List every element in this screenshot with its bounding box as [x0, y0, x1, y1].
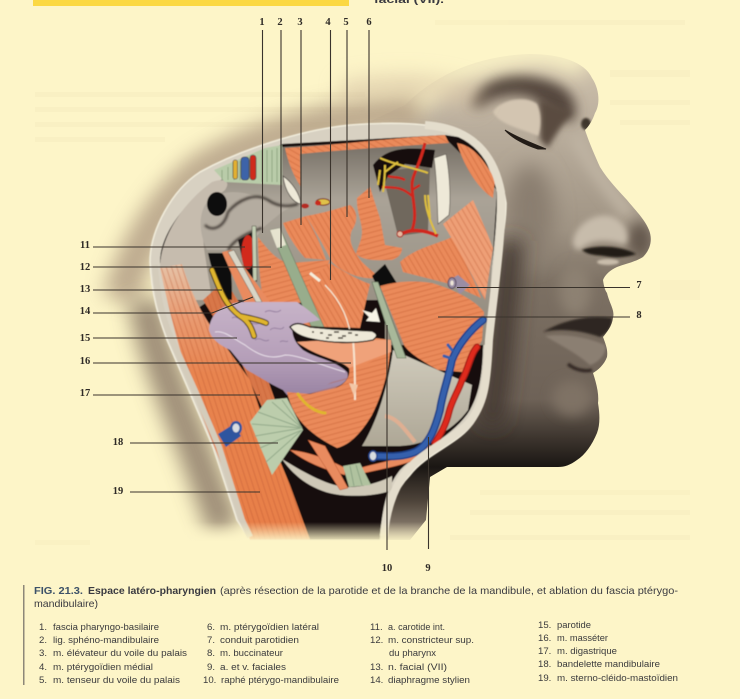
leader lines, left: [93, 247, 351, 492]
numbers, top: 6: [366, 17, 372, 28]
face shading: philtrum: [558, 272, 592, 316]
pale duct trace: [385, 416, 415, 442]
figure caption: (après résection de la parotide et de la branche de la mandibule, et ablation du fascia ptérygo-: [220, 586, 678, 597]
legend column 2: conduit parotidien: [220, 635, 299, 646]
fossa behind maxillary artery: [382, 165, 430, 236]
legend column 2: 6.: [207, 622, 215, 633]
top yellow bar: [33, 0, 349, 6]
mandibular band (18): [250, 398, 303, 475]
legend column 2: 8.: [207, 648, 215, 659]
numbers, right and bottom: [382, 280, 642, 574]
caption side rule: [23, 585, 24, 685]
legend column 4: bandelette mandibulaire: [557, 659, 660, 670]
legend column 4: parotide: [557, 620, 591, 631]
submandibular grey area: [362, 350, 472, 446]
lateral pterygoid (6): [356, 187, 402, 260]
legend column 1: m. élévateur du voile du palais: [53, 648, 187, 659]
coronoid tendon right: [434, 154, 450, 224]
numbers, left: 16: [80, 356, 90, 367]
nerve branches: [378, 158, 436, 234]
sterno-cleido-mastoid (19): [160, 264, 310, 540]
facial artery, red (9): [435, 347, 477, 443]
legend column 1: [39, 622, 187, 686]
upper green fibres: [214, 145, 282, 185]
buccinator (8): [380, 281, 484, 372]
face shading: under nostril: [597, 259, 619, 265]
numbers, top: 2: [277, 17, 283, 28]
superior constrictor (12): [258, 237, 330, 303]
leader lines, top: [262, 30, 369, 280]
numbers, top: [259, 17, 372, 28]
black gap by pterygoid: [372, 264, 398, 288]
face shading: dark beside eye: [540, 100, 572, 148]
vessels: red artery: [250, 155, 256, 180]
subdigastric sling: [282, 459, 392, 496]
numbers, top: 4: [325, 17, 331, 28]
mandible cut, bone: [290, 324, 377, 343]
parotid duct (7): [448, 275, 470, 294]
legend column 4: [538, 620, 678, 684]
leader lines, right: [438, 288, 630, 317]
legend column 2: a. et v. faciales: [220, 662, 286, 673]
numbers, right and bottom: 9: [425, 563, 431, 574]
numbers, left: 15: [80, 333, 90, 344]
numbers, right and bottom: 7: [636, 280, 642, 291]
maxillary artery: [382, 143, 438, 236]
numbers, left: 13: [80, 284, 90, 295]
face shading: sublabial crease: [568, 364, 592, 371]
digastric tendon, green: [343, 463, 371, 487]
face shading: chin: [552, 380, 592, 416]
legend column 1: 5.: [39, 675, 47, 686]
legend column 2: 9.: [207, 662, 215, 673]
legend column 3: m. constricteur sup.: [388, 635, 474, 646]
legend column 3: 14.: [370, 675, 383, 686]
legend column 4: 15.: [538, 620, 551, 631]
legend column 3: n. facial (VII): [388, 662, 447, 673]
raphe strip (10): [372, 282, 406, 358]
left contour overlay: [155, 265, 250, 537]
figure caption: Espace latéro-pharyngien: [88, 586, 216, 597]
figure caption: FIG. 21.3.: [34, 586, 83, 597]
fossa, black top: [373, 149, 435, 192]
face shading: nose tip: [628, 222, 652, 258]
legend column 4: m. masséter: [557, 633, 609, 644]
upper cheek muscle: [400, 237, 481, 298]
legend column 2: 7.: [207, 635, 215, 646]
legend column 4: m. digastrique: [557, 646, 617, 657]
artery stump: [397, 231, 403, 237]
numbers, left: 18: [113, 437, 123, 448]
legend column 1: 4.: [39, 662, 47, 673]
legend column 3: [370, 622, 474, 686]
vein stump: [369, 451, 377, 461]
dark behind carotid: [238, 230, 257, 282]
legend column 3: 13.: [370, 662, 383, 673]
temporal arch muscle: [285, 135, 449, 187]
face: closed eye lashes: [505, 130, 546, 149]
jugular stump, blue: [218, 421, 242, 447]
head haze behind cut-away: [120, 85, 480, 530]
figure caption: [34, 586, 678, 610]
legend column 4: 16.: [538, 633, 551, 644]
face shading: nostril wing: [573, 215, 628, 250]
coronoid tendon left: [283, 176, 301, 204]
face shading: nostril: [582, 247, 636, 257]
numbers, right and bottom: 8: [636, 310, 642, 321]
figure caption: mandibulaire): [34, 599, 98, 610]
numbers, top: 5: [343, 17, 349, 28]
styloid strip: [252, 226, 257, 282]
legend column 3: a. carotide int.: [388, 622, 445, 633]
cut-away anatomy: [150, 123, 506, 540]
masseter cut, lower (16): [287, 338, 391, 448]
carotid internal, red: [242, 235, 254, 269]
legend column 2: 10.: [203, 675, 216, 686]
spheno-mandibular ligament (2): [270, 228, 324, 327]
small vessels near foramen: [301, 199, 330, 208]
face shading: brow: [470, 74, 576, 122]
numbers, left: [80, 240, 123, 497]
legend column 1: 2.: [39, 635, 47, 646]
legend column 1: 3.: [39, 648, 47, 659]
numbers, left: 19: [113, 486, 123, 497]
face shading: upper lip: [543, 317, 612, 337]
numbers, left: 11: [80, 240, 90, 251]
cavity wall, grey: [165, 138, 497, 345]
legend column 3: diaphragme stylien: [388, 675, 470, 686]
right contour overlay: [384, 125, 501, 536]
legend column 3: 12.: [370, 635, 383, 646]
legend column 3: 11.: [370, 622, 383, 633]
legend column 2: m. ptérygoïdien latéral: [220, 622, 319, 633]
medial pterygoid (4): [297, 263, 370, 345]
vessels: blue vein: [241, 157, 249, 180]
tensor veli palatini (5): [306, 205, 381, 280]
face shading: nose ridge: [575, 135, 630, 215]
faint show-through text from reverse page: [35, 20, 700, 545]
legend column 1: fascia pharyngo-basilaire: [53, 622, 159, 633]
foramen, dark hole: [207, 192, 227, 216]
facial vein, blue (9): [375, 320, 483, 456]
levator veli palatini (3): [283, 216, 326, 260]
numbers, top: 1: [259, 17, 265, 28]
legend column 4: m. sterno-cléido-mastoïdien: [557, 673, 678, 684]
legend column 4: 19.: [538, 673, 551, 684]
vessels: yellow nerve: [233, 160, 238, 179]
black pharyngeal gap: [208, 253, 232, 300]
head contour band: [150, 123, 506, 540]
cavity base, black: [160, 135, 497, 540]
face profile: [388, 54, 651, 540]
face shading: eyelid: [493, 99, 540, 136]
face shading: cheek: [506, 165, 554, 265]
facial nerve branch in masseter: [298, 394, 325, 413]
numbers, top: 3: [297, 17, 303, 28]
white flow arrow: [362, 308, 380, 322]
stylohyoid muscle strips: [290, 440, 432, 490]
digastric (17): [203, 280, 275, 420]
face shading: dark along band: [490, 240, 512, 425]
pale band on the left of cavity: [160, 180, 227, 300]
legend column 1: m. ptérygoïdien médial: [53, 662, 153, 673]
numbers, left: 14: [80, 306, 91, 317]
legend column 2: m. buccinateur: [220, 648, 284, 659]
legend column 2: [203, 622, 339, 686]
facial nerve, yellow (13): [212, 270, 266, 336]
skull base dark fold: [205, 197, 298, 250]
leader lines, bottom: [387, 325, 428, 550]
legend column 1: m. tenseur du voile du palais: [53, 675, 180, 686]
upper white stick arrow: [310, 273, 320, 281]
stylian diaphragm muscles (14): [222, 250, 270, 304]
legend column 4: 18.: [538, 659, 551, 670]
numbers, right and bottom: 10: [382, 563, 392, 574]
numbers, left: 17: [80, 388, 90, 399]
legend column 1: 1.: [39, 622, 47, 633]
parotid gland (15): [209, 302, 348, 395]
face shading: lower lip: [545, 335, 605, 365]
face shading: inner canthus: [581, 118, 591, 130]
fade at the bottom of the illustration: [90, 522, 440, 556]
legend column 1: lig. sphéno-mandibulaire: [53, 635, 159, 646]
temporal muscle right: [457, 143, 495, 198]
legend column 2: raphé ptérygo-mandibulaire: [221, 675, 339, 686]
zygomatic muscle: [443, 200, 493, 300]
legend column 3: du pharynx: [389, 648, 436, 659]
legend column 4: 17.: [538, 646, 551, 657]
numbers, left: 12: [80, 262, 90, 273]
skull base process: [201, 192, 298, 250]
